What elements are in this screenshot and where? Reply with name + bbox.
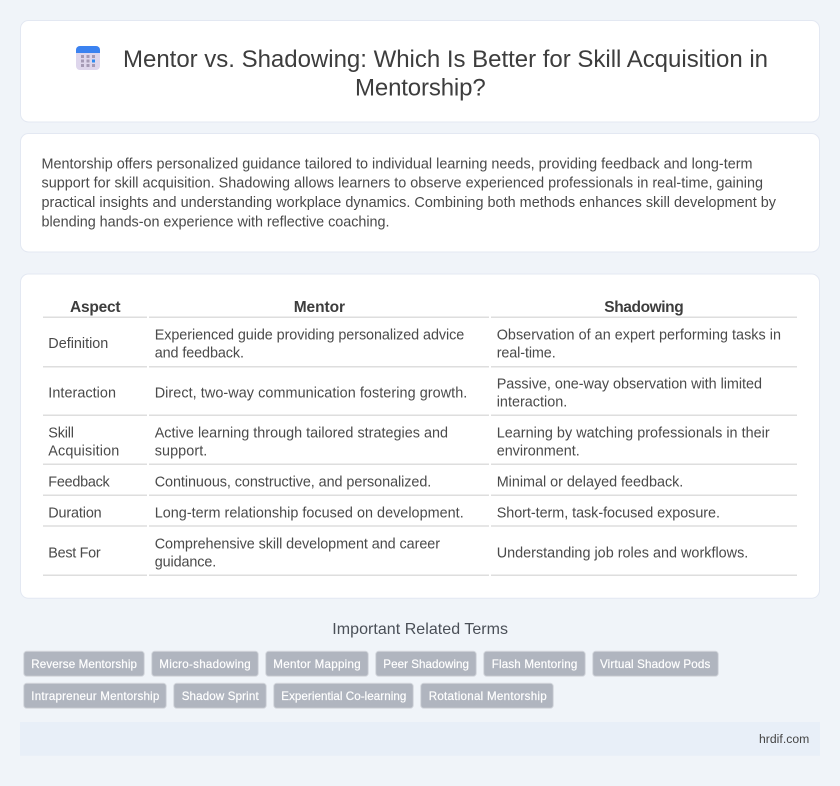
footer source text: hrdif.com bbox=[759, 732, 809, 746]
tag: Virtual Shadow Pods bbox=[593, 651, 718, 676]
table row: Interaction: Passive, one-way observation with limited bbox=[497, 376, 762, 392]
table row: Skill Acquisition: Skill bbox=[48, 425, 74, 441]
table row: Interaction: Direct, two-way communication fostering growth. bbox=[155, 385, 467, 401]
table row: Best For bbox=[48, 536, 748, 570]
tag: Rotational Mentorship: Rotational Mentorship bbox=[429, 690, 547, 703]
table row: Best For: Comprehensive skill development and career bbox=[155, 536, 440, 552]
tag: Shadow Sprint bbox=[174, 683, 266, 708]
panel: title header bbox=[20, 20, 820, 122]
tag: Reverse Mentorship bbox=[24, 651, 144, 676]
table row: Skill Acquisition: environment. bbox=[497, 443, 580, 459]
tag: Flash Mentoring: Flash Mentoring bbox=[492, 658, 577, 671]
tag: Shadow Sprint: Shadow Sprint bbox=[182, 690, 259, 703]
table row: Definition: real-time. bbox=[497, 345, 556, 361]
title bbox=[123, 46, 768, 102]
tag: Peer Shadowing bbox=[376, 651, 476, 676]
text block: introduction paragraph: practical insights and understanding workplace dynamics. Combining both methods enhances skill development by bbox=[42, 195, 777, 211]
text block: introduction paragraph: support for skill acquisition. Shadowing allows learners to observe experienced professionals in real-time, gaining bbox=[42, 176, 763, 192]
tag: Flash Mentoring bbox=[484, 651, 585, 676]
tag: Peer Shadowing: Peer Shadowing bbox=[383, 658, 469, 671]
title: Mentorship? bbox=[355, 75, 486, 102]
tag: Experiential Co-learning bbox=[274, 683, 413, 708]
tag: Experiential Co-learning: Experiential Co-learning bbox=[281, 690, 406, 703]
table row: Skill Acquisition: support. bbox=[155, 443, 207, 459]
table row: Interaction: Interaction bbox=[48, 385, 116, 401]
tag: Micro-shadowing: Micro-shadowing bbox=[159, 658, 251, 671]
table row: Interaction bbox=[48, 376, 762, 410]
footer bbox=[20, 722, 820, 756]
tag: Reverse Mentorship: Reverse Mentorship bbox=[31, 658, 137, 671]
table row: Interaction: interaction. bbox=[497, 394, 567, 410]
text block: introduction paragraph bbox=[42, 156, 777, 230]
text block: introduction paragraph: blending hands-on experience with reflective coaching. bbox=[42, 214, 390, 230]
table row: Duration: Long-term relationship focused on development. bbox=[155, 505, 464, 521]
table row: Skill Acquisition: Acquisition bbox=[48, 443, 119, 459]
table row: Feedback: Feedback bbox=[48, 474, 110, 490]
text block: introduction paragraph: Mentorship offers personalized guidance tailored to individual learning needs, providing feedback and long-term bbox=[42, 156, 752, 172]
table header row: Mentor bbox=[294, 299, 345, 316]
table row: Definition: and feedback. bbox=[155, 345, 244, 361]
table row: Feedback: Minimal or delayed feedback. bbox=[497, 474, 683, 490]
table row: Feedback: Continuous, constructive, and personalized. bbox=[155, 474, 431, 490]
tag: Mentor Mapping bbox=[266, 651, 368, 676]
tag: Virtual Shadow Pods: Virtual Shadow Pods bbox=[600, 658, 711, 671]
table header row: Shadowing bbox=[604, 299, 684, 316]
tag: Rotational Mentorship bbox=[421, 683, 553, 708]
heading: related terms: Important Related Terms bbox=[332, 621, 508, 638]
table row: Definition: Observation of an expert performing tasks in bbox=[497, 327, 781, 343]
tag: Intrapreneur Mentorship: Intrapreneur Mentorship bbox=[31, 690, 159, 703]
table row: Feedback bbox=[48, 474, 683, 490]
table row: Definition: Definition bbox=[48, 336, 108, 352]
table row: Skill Acquisition: Learning by watching professionals in their bbox=[497, 425, 770, 441]
table row: Best For: Best For bbox=[48, 545, 101, 561]
tag group: related terms bbox=[24, 651, 718, 708]
table row: Definition bbox=[48, 327, 781, 361]
table header row: Aspect bbox=[70, 299, 120, 316]
table row: Duration: Short-term, task-focused exposure. bbox=[497, 505, 720, 521]
panel: introduction bbox=[20, 134, 820, 252]
tag: Intrapreneur Mentorship bbox=[24, 683, 166, 708]
panel: comparison table bbox=[20, 274, 820, 598]
table row: Duration bbox=[48, 505, 720, 521]
tag: Mentor Mapping: Mentor Mapping bbox=[273, 658, 361, 671]
table row: Skill Acquisition bbox=[48, 425, 770, 459]
icon: calendar bbox=[76, 46, 100, 70]
title: Mentor vs. Shadowing: Which Is Better for Skill Acquisition in bbox=[123, 46, 768, 73]
tag: Micro-shadowing bbox=[152, 651, 258, 676]
table row: Definition: Experienced guide providing personalized advice bbox=[155, 327, 464, 343]
table row: Best For: Understanding job roles and workflows. bbox=[497, 545, 748, 561]
table row: Best For: guidance. bbox=[155, 554, 216, 570]
table row: Skill Acquisition: Active learning through tailored strategies and bbox=[155, 425, 448, 441]
table header row bbox=[70, 299, 684, 316]
table row: Duration: Duration bbox=[48, 505, 102, 521]
